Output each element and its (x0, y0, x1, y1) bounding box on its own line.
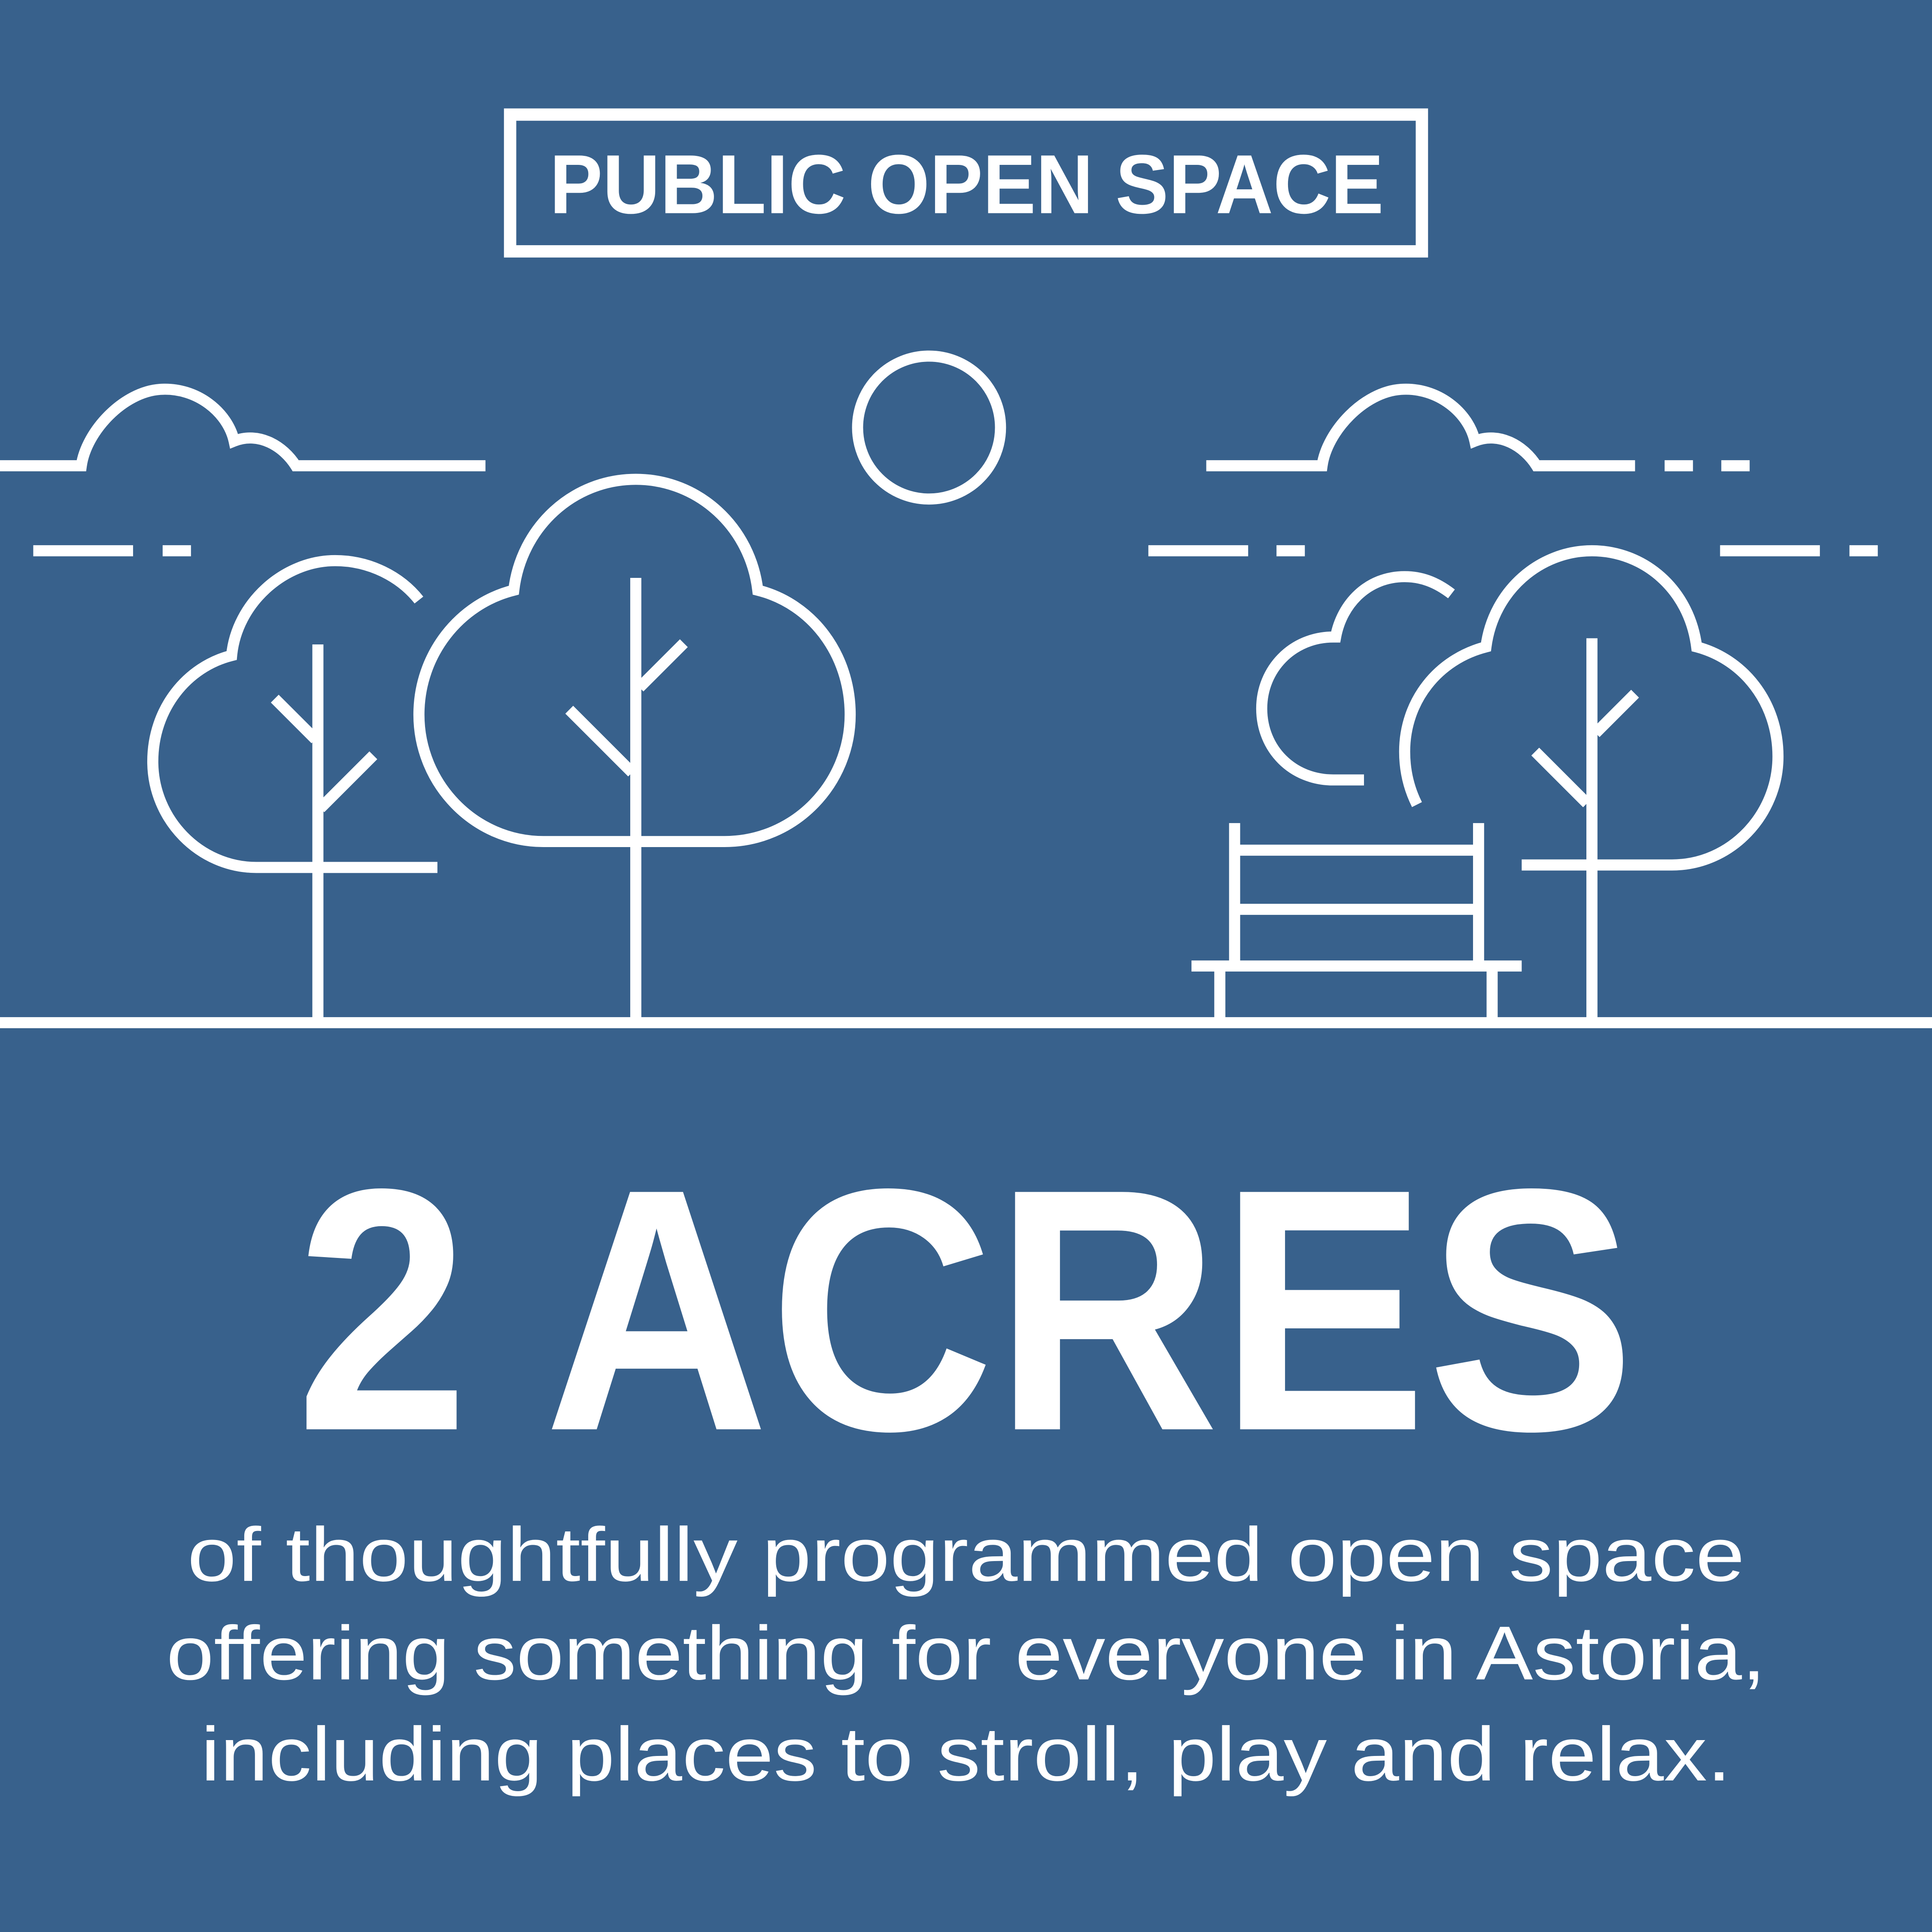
icon: big tree (419, 479, 850, 1023)
title: PUBLIC OPEN SPACE (550, 137, 1384, 231)
icon: bench (1191, 823, 1522, 1023)
icon: small left tree (153, 561, 437, 1023)
icon: right cloud (1148, 389, 1878, 551)
headline stat: 2 ACRES (296, 1118, 1635, 1503)
icon: sun (857, 356, 1000, 499)
ground line (0, 1021, 1932, 1025)
icon: right tree (1405, 551, 1778, 1023)
description text: offering something for everyone in Astoria, (166, 1610, 1766, 1696)
icon: left cloud (0, 389, 486, 551)
park illustration (0, 356, 1932, 1023)
icon: bush (1262, 577, 1452, 780)
description text: of thoughtfully programmed open space (187, 1512, 1745, 1597)
title (510, 115, 1422, 251)
description text (166, 1512, 1766, 1797)
description text: including places to stroll, play and relax. (201, 1711, 1731, 1797)
